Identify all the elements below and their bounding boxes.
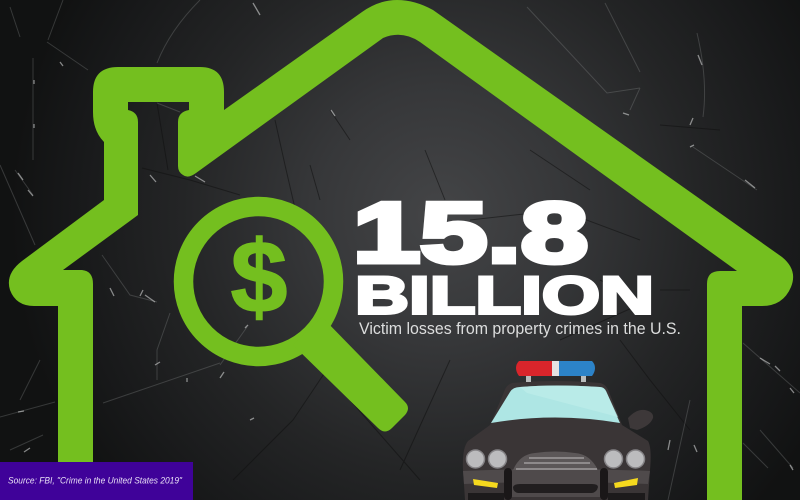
- subtitle text: Victim losses from property crimes in the U.S.: [359, 320, 681, 338]
- wheels: [468, 493, 645, 500]
- headlights: [466, 450, 644, 468]
- heading: BILLION: BILLION: [355, 266, 654, 326]
- fog lights: [473, 479, 498, 488]
- icon: dollar sign: $: [231, 220, 287, 334]
- bumper: [463, 469, 650, 484]
- heading: 15.8: 15.8: [353, 186, 588, 281]
- source box: [0, 462, 193, 500]
- car body: [463, 381, 651, 500]
- roof light bar: [516, 361, 595, 382]
- source box: Source: FBI, "Crime in the United States 2019": [8, 476, 183, 486]
- magnifying glass icon: [184, 206, 408, 432]
- grille: [513, 452, 598, 470]
- windshield: [491, 386, 620, 423]
- police car illustration: [463, 361, 653, 500]
- side mirror: [628, 410, 653, 430]
